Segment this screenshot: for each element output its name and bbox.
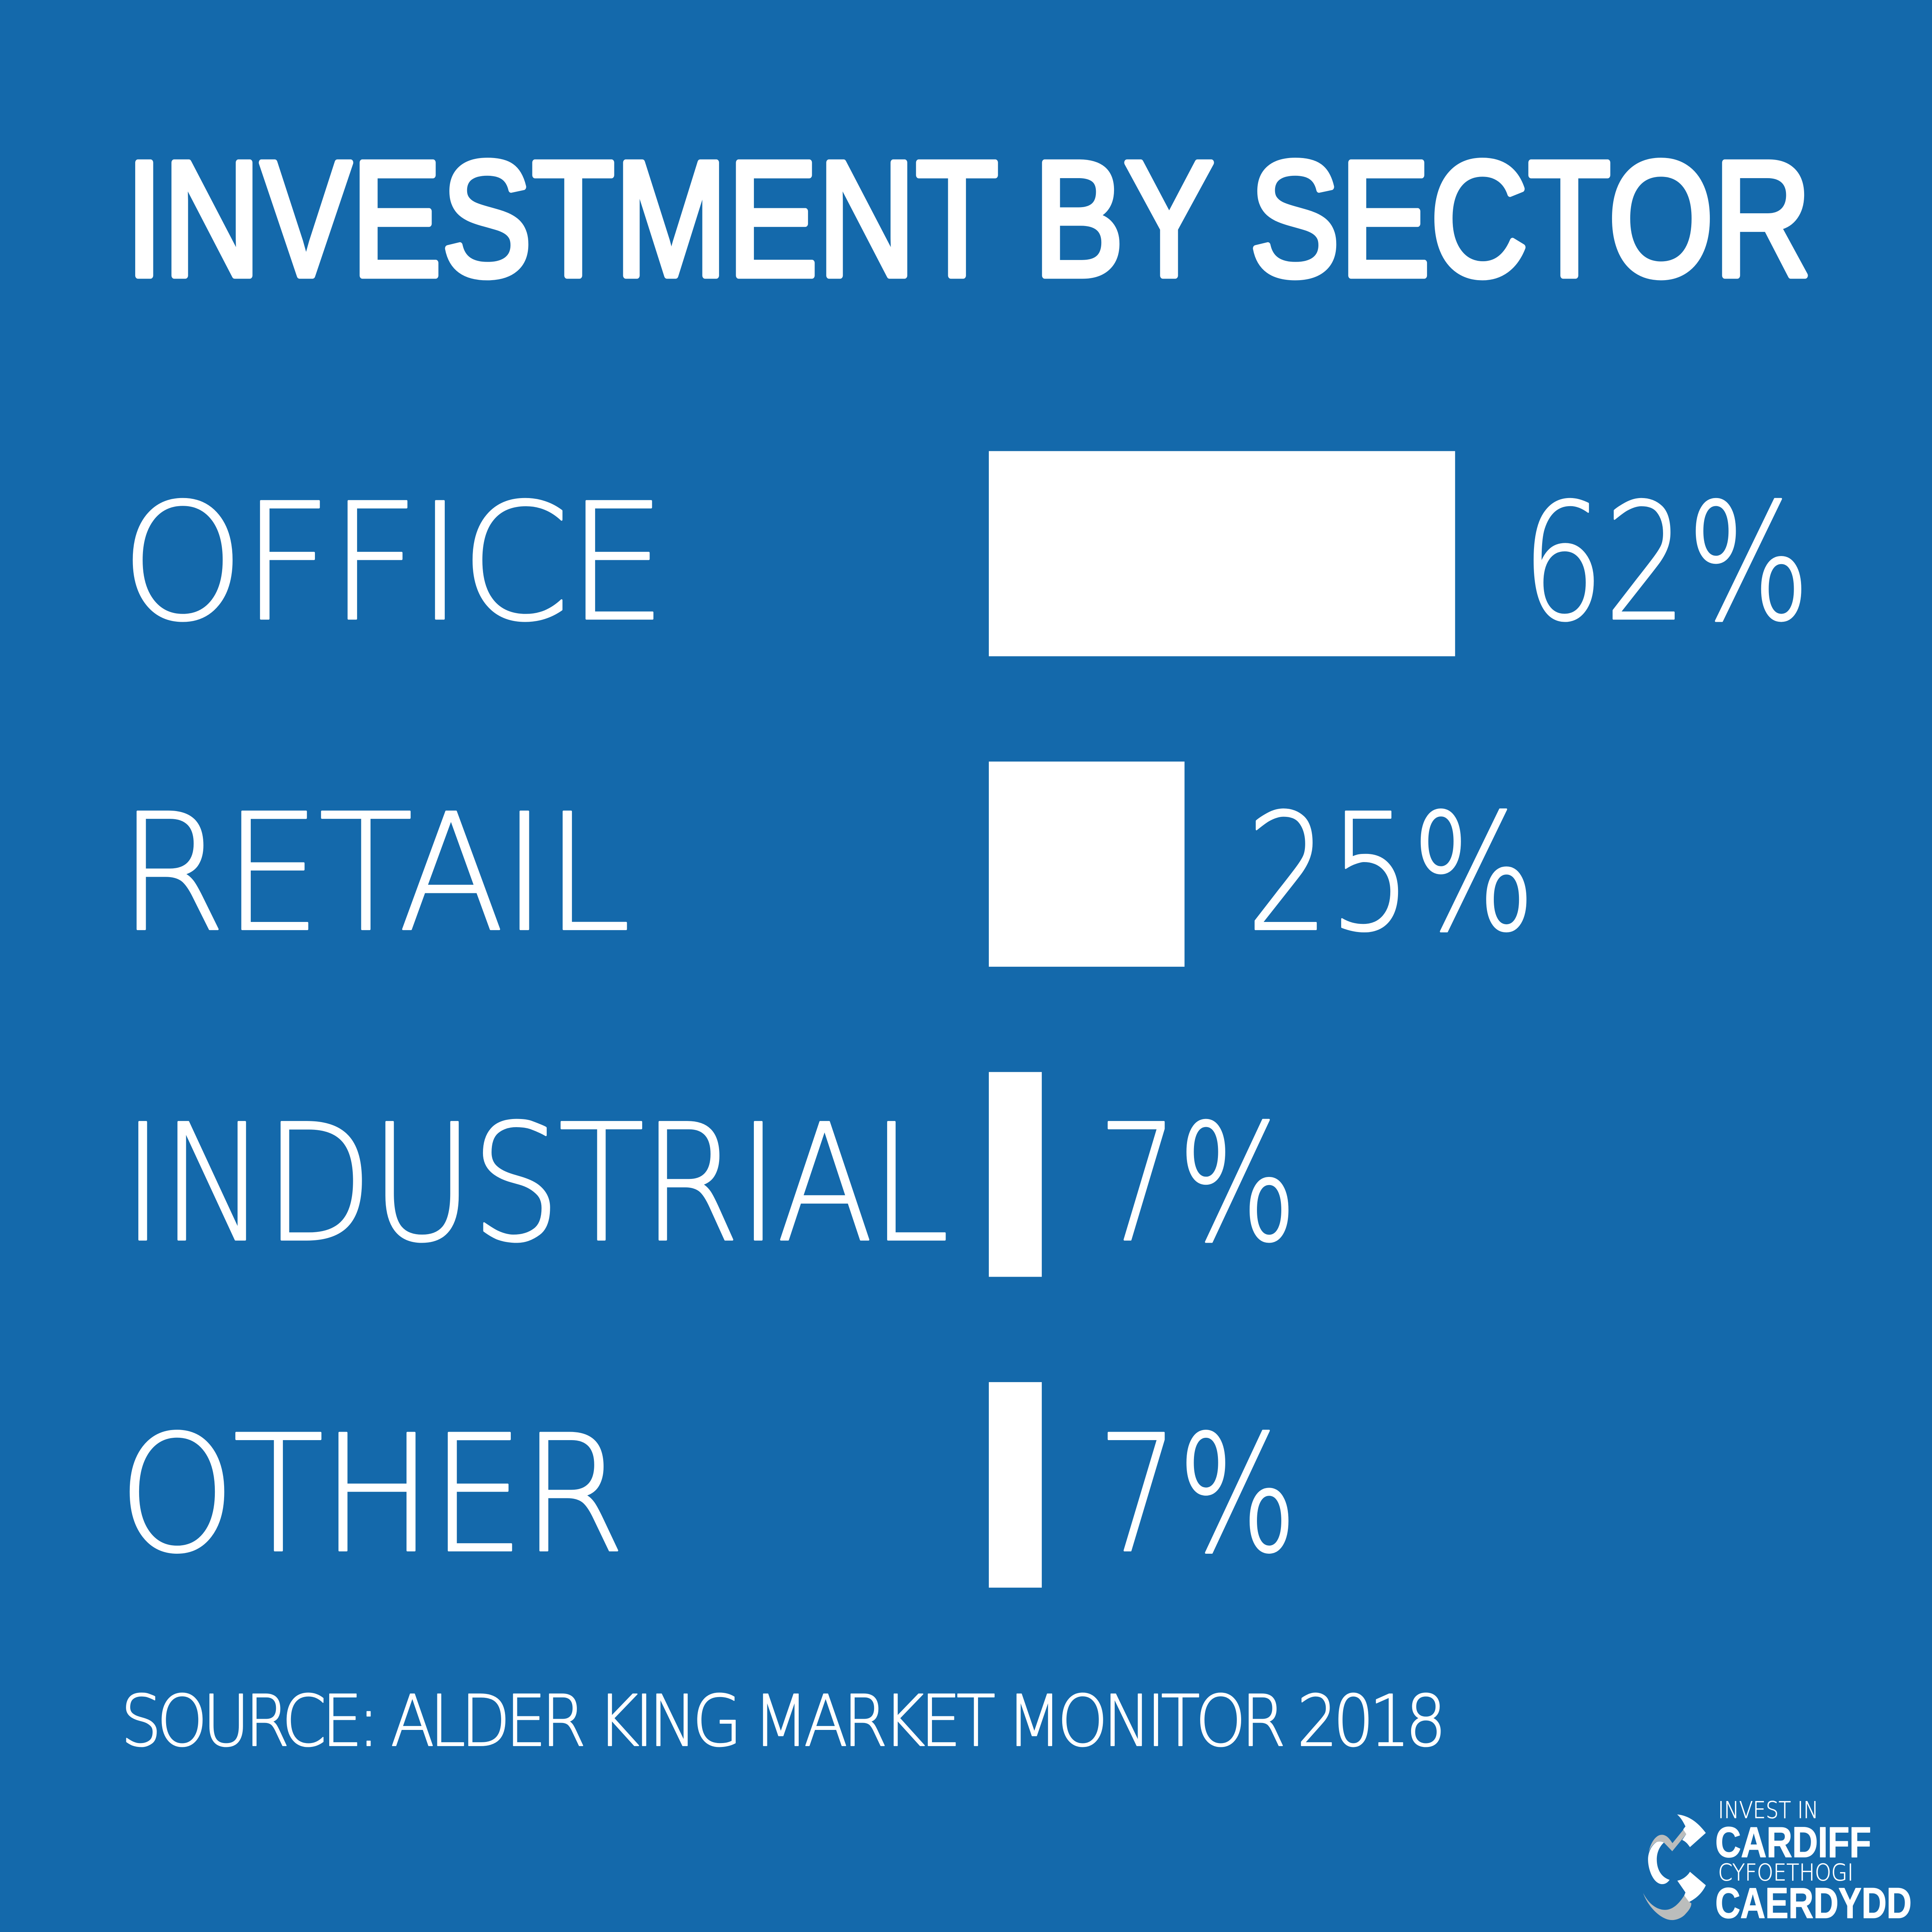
label: retail: RETAIL xyxy=(118,780,628,968)
value: office 62%: 62% xyxy=(1522,469,1810,657)
row: other xyxy=(118,1382,1297,1589)
label: office: OFFICE xyxy=(121,469,664,657)
title: INVESTMENT BY SECTOR xyxy=(126,127,1811,311)
label: industrial: INDUSTRIAL xyxy=(122,1090,947,1278)
value: other 7%: 7% xyxy=(1098,1401,1297,1589)
bar: other 7% xyxy=(989,1382,1042,1588)
bar chart: investment by sector xyxy=(118,451,1810,1589)
bar: retail 25% xyxy=(989,762,1185,967)
icon: logo mark xyxy=(1643,1815,1706,1920)
bar: office 62% xyxy=(989,451,1455,656)
row: industrial xyxy=(122,1072,1297,1278)
logo text: invest in: INVEST IN xyxy=(1718,1797,1818,1824)
source note: SOURCE: ALDER KING MARKET MONITOR 2018 xyxy=(121,1680,1442,1762)
row: office xyxy=(121,451,1810,657)
label: other: OTHER xyxy=(118,1401,623,1589)
logo: Invest in Cardiff xyxy=(1643,1797,1912,1927)
value: industrial 7%: 7% xyxy=(1098,1090,1297,1278)
logo text: cardiff: CARDIFF xyxy=(1715,1818,1871,1866)
logo text: caerdydd: CAERDYDD xyxy=(1715,1879,1912,1927)
row: retail xyxy=(118,762,1536,968)
logo text: cyfoethogi: CYFOETHOGI xyxy=(1718,1860,1854,1886)
bar: industrial 7% xyxy=(989,1072,1042,1277)
value: retail 25%: 25% xyxy=(1246,780,1536,968)
